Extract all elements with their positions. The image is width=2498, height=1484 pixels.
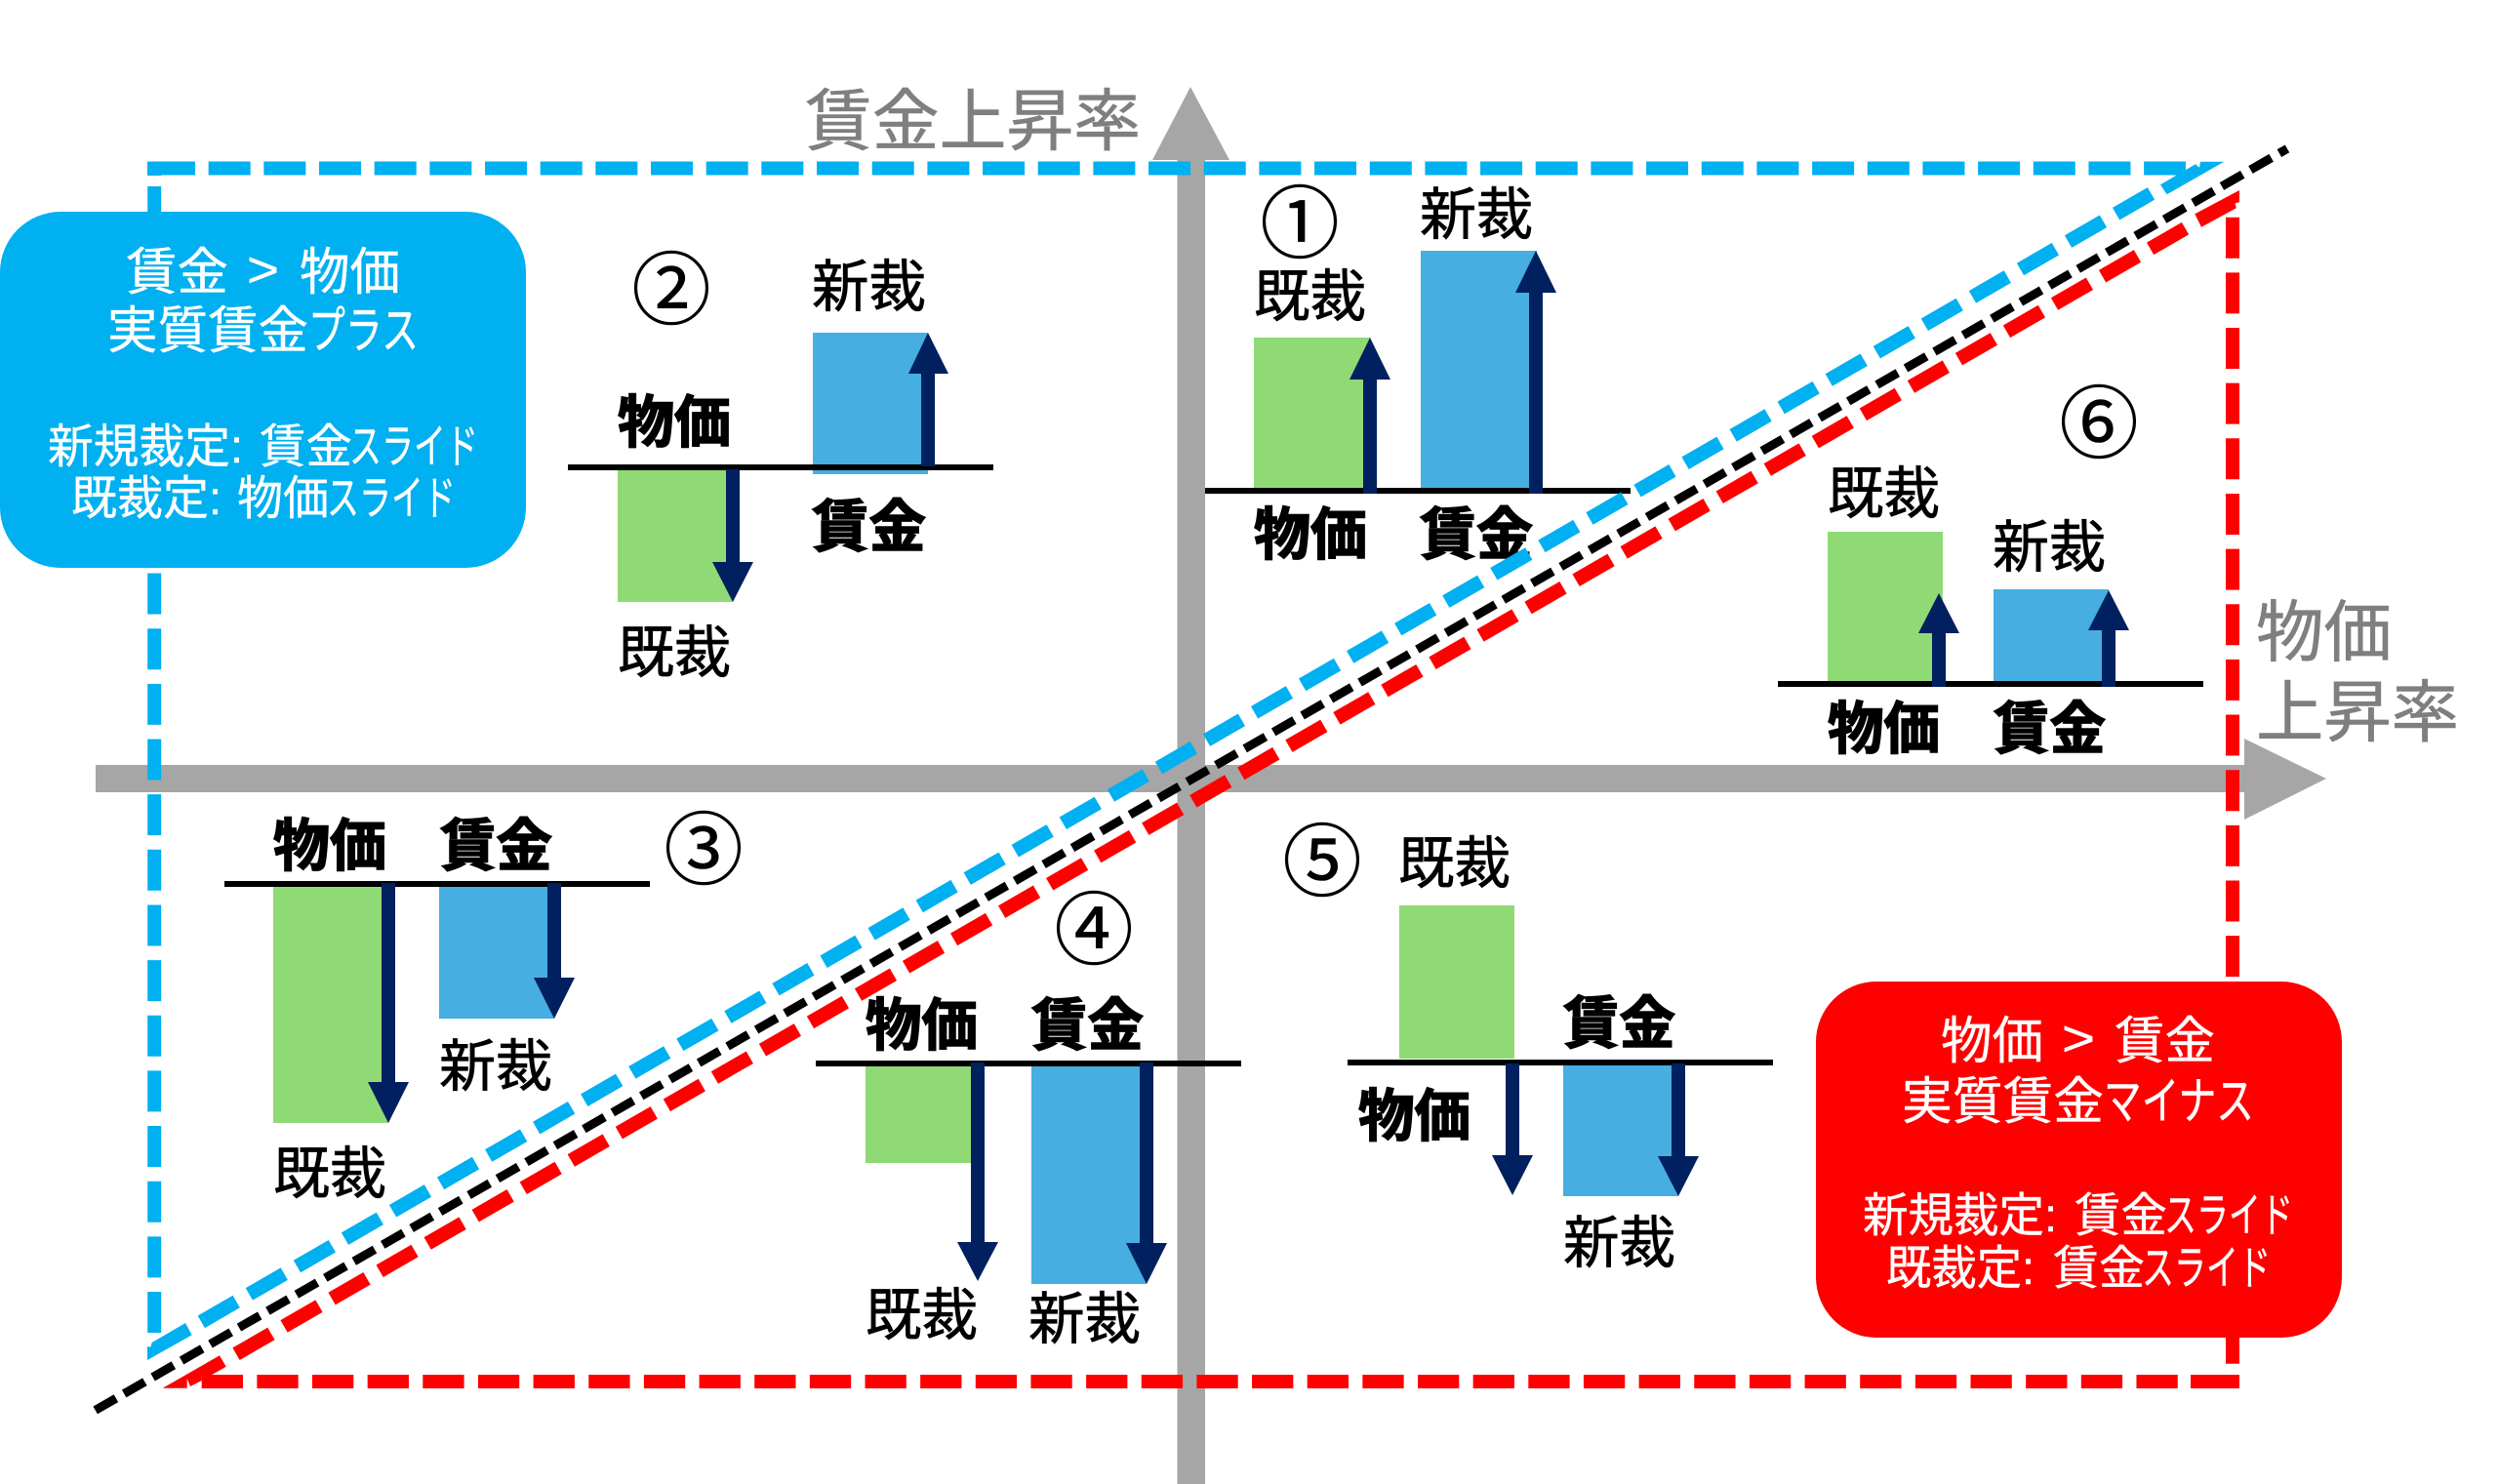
labels: 賃金 (1420, 503, 1533, 567)
circled number 2: ② (631, 248, 711, 336)
callout details: スライド (349, 421, 478, 473)
panel 6 (1778, 381, 2203, 761)
callout details: スライド (2164, 1190, 2293, 1242)
labels: 既裁 (1398, 832, 1511, 896)
labels (1828, 462, 2106, 761)
blue dashed region: real wage plus (147, 162, 2224, 1360)
panel 2 (568, 248, 993, 685)
vertical axis arrow: wage growth (1152, 87, 1229, 1484)
labels: 賃金 (1994, 698, 2106, 761)
callout: wages above prices (0, 212, 526, 568)
circled number 1: ① (1260, 181, 1340, 269)
callout heading: 物価 (300, 245, 400, 301)
horizontal axis label: 上昇率 (2256, 675, 2459, 750)
labels: 物価 (866, 994, 978, 1058)
circled number 5: ⑤ (1282, 820, 1362, 907)
labels: 物価 (1358, 1085, 1471, 1148)
horizontal axis arrow: price growth (96, 739, 2326, 820)
bars (866, 1066, 1147, 1284)
callout heading: 賃金 (2115, 1014, 2215, 1070)
callout heading: 実質賃金 (1902, 1074, 2104, 1131)
callout heading: マイナス (2104, 1074, 2254, 1131)
labels: 既裁 (273, 1143, 386, 1206)
labels: 新裁 (1993, 516, 2106, 580)
red dashed region: real wage minus (163, 190, 2239, 1388)
callout heading (1902, 1011, 2254, 1131)
labels: 賃金 (812, 496, 926, 559)
baseline (1348, 1060, 1773, 1065)
horizontal axis label (2256, 595, 2459, 750)
labels: 賃金 (440, 815, 552, 878)
labels: 新裁 (439, 1035, 552, 1099)
callout details (48, 421, 478, 525)
arrows (1350, 251, 1556, 494)
circled number 3: ③ (664, 808, 744, 896)
labels: 物価 (273, 815, 386, 878)
circled number 4: ④ (1054, 888, 1134, 976)
bars (1828, 532, 2109, 681)
labels (1358, 832, 1675, 1275)
labels: 新裁 (1420, 183, 1533, 247)
labels: 新裁 (812, 256, 926, 319)
arrows (712, 333, 948, 602)
callout details (1863, 1190, 2293, 1295)
labels: 既裁 (866, 1284, 978, 1347)
panel 4 (816, 888, 1241, 1351)
callout details: 新規裁定: (48, 421, 243, 473)
baseline (224, 881, 650, 887)
labels: 物価 (1254, 503, 1367, 567)
black dashed diagonal: equal growth line (96, 148, 2287, 1410)
baseline (1778, 681, 2203, 687)
bars (273, 886, 554, 1123)
horizontal axis label: 物価 (2256, 595, 2392, 670)
callout details: スライド (2142, 1243, 2271, 1295)
bars (1399, 905, 1678, 1196)
callout heading: プラス (308, 303, 419, 360)
labels (1254, 183, 1533, 567)
callout details: 新規裁定: (1863, 1190, 2057, 1242)
vertical axis label: 賃金上昇率 (805, 84, 1141, 159)
arrows (957, 1063, 1167, 1284)
labels: 新裁 (1028, 1288, 1141, 1351)
callout heading: 賃金 (126, 245, 228, 301)
labels: 物価 (618, 391, 731, 455)
callout details: 賃金 (260, 421, 352, 473)
callout details: 賃金 (2075, 1190, 2167, 1242)
labels: 賃金 (1563, 992, 1675, 1056)
bars (618, 333, 928, 602)
callout heading: > (2062, 1011, 2095, 1067)
callout details: 既裁定: (1886, 1243, 2035, 1295)
callout: prices above wages (1816, 982, 2342, 1338)
baseline (568, 464, 993, 470)
callout heading: 実質賃金 (107, 303, 308, 360)
callout details: 賃金 (2053, 1243, 2145, 1295)
labels: 新裁 (1563, 1212, 1675, 1275)
panel 3 (224, 808, 744, 1206)
labels (618, 256, 926, 685)
labels: 賃金 (1031, 994, 1144, 1058)
callout heading: 物価 (1941, 1014, 2043, 1070)
callout heading: > (247, 242, 279, 299)
callout details: 物価 (237, 473, 329, 525)
labels (866, 994, 1144, 1351)
labels: 既裁 (618, 622, 731, 685)
circled number 6: ⑥ (2059, 381, 2139, 469)
arrows (1492, 1063, 1699, 1196)
callout heading (107, 242, 419, 360)
baseline (816, 1061, 1241, 1066)
labels: 既裁 (1828, 462, 1940, 526)
callout details: 既裁定: (71, 473, 222, 525)
arrows (1918, 590, 2129, 687)
baseline (1205, 488, 1631, 494)
callout details: スライド (327, 473, 456, 525)
bars (1254, 251, 1537, 488)
panel 1 (1205, 181, 1631, 567)
labels: 物価 (1828, 698, 1940, 761)
panel 5 (1282, 820, 1773, 1275)
labels: 既裁 (1254, 265, 1366, 329)
arrows (368, 883, 575, 1123)
labels (273, 815, 552, 1206)
